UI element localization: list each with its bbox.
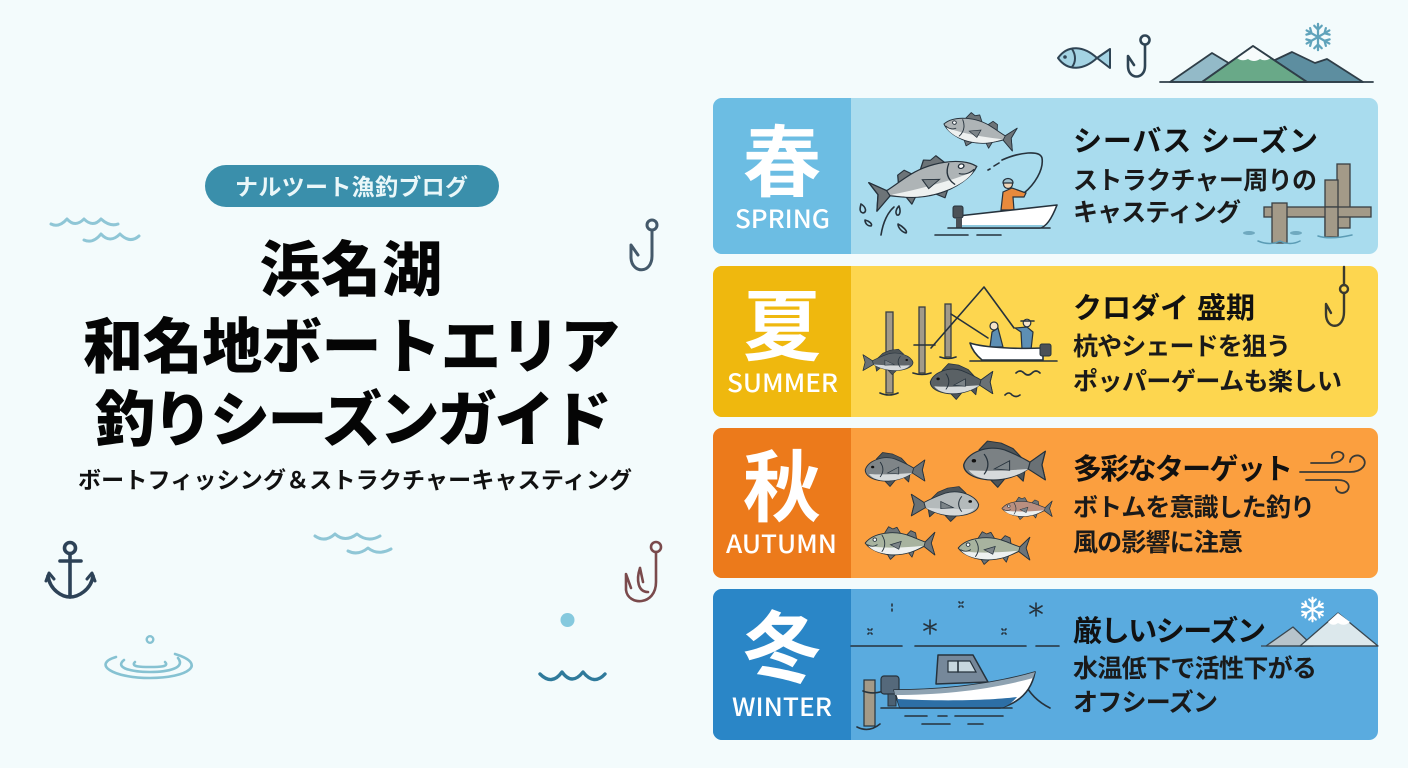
season label: spring: SPRING [735,200,830,236]
text: spring: シーバス シーズン [1073,124,1318,158]
icon: hook dark [631,220,657,270]
icon: snowflake [1301,598,1324,621]
illustration: splash [860,204,906,235]
text: spring: ストラクチャー周りの [1073,167,1317,195]
panel: autumn [713,428,1378,578]
illustration: leaping sea bass [867,107,1018,217]
panel: winter [713,589,1378,740]
icon: water drop dot [560,613,574,627]
text: winter [1073,614,1317,717]
season label: winter [732,605,832,724]
season label: summer [727,283,838,400]
season label: spring [735,119,830,236]
text: autumn: 多彩なターゲット [1073,453,1293,486]
text: spring [1073,124,1318,227]
badge: blog name [205,165,499,207]
panel: summer [713,266,1378,417]
text: autumn [1073,453,1315,557]
text: autumn: ボトムを意識した釣り [1073,494,1315,522]
icon: waves top left [51,219,139,241]
season label: autumn: 秋 [743,444,821,532]
icon: waves bottom right [540,672,605,680]
text: summer [1073,291,1342,396]
panel: title block [78,165,632,493]
icon: anchor [46,542,95,597]
season label: winter: 冬 [743,605,821,693]
text: winter: 水温低下で活性下がる [1073,654,1317,683]
season label: winter: WINTER [732,688,832,724]
title [83,237,620,454]
text: summer: クロダイ 盛期 [1073,291,1255,325]
season label: summer: 夏 [743,283,821,371]
icon: hook red [626,542,661,601]
illustration: snow specks and horizon [851,602,1059,646]
icon: waves centre [315,534,391,553]
season label: summer: SUMMER [727,364,838,400]
illustration: posts and fish [863,304,1040,399]
text: summer: 杭やシェードを狙う [1073,333,1291,361]
title: 和名地ボートエリア [83,314,620,381]
season label: autumn [726,444,837,561]
subtitle: ボートフィッシング＆ストラクチャーキャスティング [78,467,632,493]
text: summer: ポッパーゲームも楽しい [1073,368,1342,396]
icon: water ripple [106,636,192,678]
icon: snow mountains [1261,613,1378,646]
season label: autumn: AUTUMN [726,525,837,561]
text: winter: 厳しいシーズン [1073,614,1266,648]
illustration: moored boat [857,655,1050,729]
title: 浜名湖 [260,237,442,304]
badge: blog name: ナルツート漁釣ブログ [235,174,468,200]
title: 釣りシーズンガイド [95,387,612,454]
icon group: fish hook mountains [1058,24,1373,82]
icon: hook [1326,267,1348,326]
icon: small fish [1058,48,1110,68]
illustration: anglers on boat [931,287,1057,361]
icon: wind [1300,452,1365,493]
text: autumn: 風の影響に注意 [1073,529,1243,557]
icon: small hook [1128,36,1150,76]
illustration: pier posts [1243,164,1371,244]
illustration: angler on boat [935,153,1057,235]
illustration: six fish [865,441,1052,564]
text: winter: オフシーズン [1073,688,1218,717]
season label: spring: 春 [743,119,821,207]
icon: snowflake [1305,24,1331,50]
icon: mountains [1160,46,1373,82]
text: spring: キャスティング [1073,198,1241,227]
panel: spring [713,98,1378,254]
